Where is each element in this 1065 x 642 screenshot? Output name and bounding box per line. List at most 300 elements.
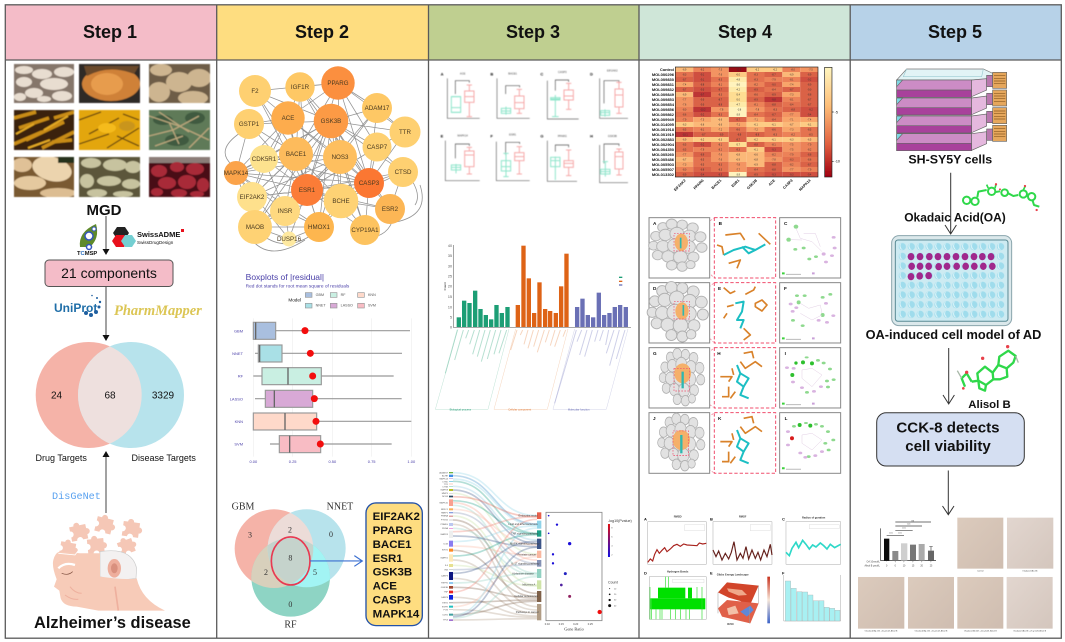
chart: cell viability bars: 25 [930, 565, 933, 567]
legend: p value colour and count: 20 [614, 594, 617, 596]
chart: cell viability bars: 10 [903, 565, 906, 567]
sankey flows [453, 473, 537, 620]
micrographs: cell morphology: Okadaic(OA) 24h +10 μmol/L Alisol B [865, 630, 898, 633]
heatmap cell values: -8.9 -9.4 -9.3 -3.8 -8.9 -9.3 -9.3 -9.4 [682, 175, 812, 177]
callout: hub gene list: GSK3B [373, 567, 412, 579]
chart: GO enrichment bars: 0 [450, 326, 452, 330]
sankey right pathways: MAPK signaling pathway [510, 541, 540, 545]
subplot titles: C [540, 72, 543, 77]
chart: boxplots of residuals [230, 272, 416, 464]
heatmap row labels: MOL014095 [652, 122, 675, 127]
chart: GO enrichment bars: Molecular function [568, 408, 590, 412]
chart: cell viability bars: 15 [912, 565, 915, 567]
heatmap row labels: MOL013302 [652, 172, 675, 177]
venn diagram: drug and disease targets: 3329 [152, 390, 175, 402]
subplot titles: GSK3B [608, 134, 617, 138]
chart: cell viability bars: - [886, 562, 887, 564]
callout: hub gene list: ACE [373, 581, 397, 593]
legend: p value colour and count: 2 [611, 554, 612, 556]
subplot titles: H [590, 134, 593, 139]
header: Step 4 [639, 5, 850, 60]
docking row J K L [649, 413, 841, 473]
axis labels: 0.75 [368, 459, 376, 464]
parallelogram category brackets [435, 329, 628, 409]
heatmap colour bar: -5 [835, 110, 838, 114]
heatmap cell values: -7.3 -8.5 -8.3 -7.8 -6.9 -8.8 -8.2 -8.7 [682, 165, 812, 167]
heatmap column labels: CASP3 [782, 179, 794, 190]
node labels: CYP19A1 [351, 227, 379, 234]
chart: cell viability bars: 0 [886, 565, 888, 567]
chart: GO enrichment bars: 10 [448, 305, 452, 309]
heatmap cell values: -8.3 -9.1 -7.6 -6.0 -8.3 -8.7 -6.9 -8.9 [682, 75, 812, 77]
heatmap cell values: -6.9 -9.7 -8.3 -5.4 -8.6 -8.9 -7.3 -8.8 [682, 95, 812, 97]
node labels: BCHE [332, 198, 350, 205]
sankey left genes: MAPK3 [441, 533, 449, 536]
panel: step 5 experiment workflow [858, 69, 1053, 633]
venn diagram: GBM NNET RF: RF [284, 620, 297, 631]
venn diagram: drug and disease targets: 68 [104, 390, 116, 402]
node labels: NOS3 [332, 154, 349, 161]
sankey left genes: IL1B [444, 543, 449, 545]
heatmap column labels: PPARG [693, 178, 705, 190]
sankey left genes: TTR [444, 484, 448, 486]
heatmap cell values: -8.5 -9.2 -8.1 -5.7 -8.8 -8.1 -7.5 -7.9 [682, 145, 812, 147]
docking row D E F [647, 282, 841, 343]
chart: cell viability bars: **** [902, 529, 906, 531]
legend: p value colour and count [608, 519, 632, 607]
subplot titles: MAPK14 [457, 133, 468, 137]
node labels: ESR2 [382, 206, 399, 213]
logo: UniProt [54, 295, 101, 317]
figure: molecular dynamics panels [644, 514, 841, 626]
callout: hub gene list: BACE1 [373, 539, 412, 551]
chart: cell viability bars: + [912, 562, 914, 564]
callout: hub gene list: EIF2AK2 [373, 511, 420, 523]
dot plot: Gene Ratio [564, 626, 584, 631]
sankey right pathways: TNF signaling pathway [511, 531, 539, 535]
node labels: F2 [251, 88, 259, 95]
node labels: GSTP1 [239, 121, 260, 128]
heatmap row labels: MOL005260 [652, 152, 675, 157]
legend: p value colour and count: Count [608, 580, 618, 584]
sankey right pathways: Lipid and atherosclerosis [508, 522, 538, 526]
callout: hub gene list: ESR1 [373, 553, 403, 565]
node labels [224, 80, 412, 243]
sankey left genes: ESR1 [442, 602, 449, 604]
chart: GO enrichment bars: 35 [448, 254, 452, 258]
legend: p value colour and count: 40 [614, 605, 617, 607]
subplot titles: ESR1 [509, 132, 517, 136]
arrow: components to venn [102, 286, 110, 341]
sankey right pathways: Endocrine resist [518, 513, 538, 517]
dot plot: 0.15 [559, 622, 564, 626]
venn diagram: GBM NNET RF: NNET [327, 501, 353, 512]
chart: GO enrichment bars: Count [443, 282, 447, 290]
sankey left genes [439, 472, 453, 622]
sankey left genes: NOS3 [442, 496, 449, 498]
chart: RMSF [710, 514, 772, 564]
dot plot: 0.25 [588, 622, 593, 626]
chart: GO enrichment bars: Biological process [450, 408, 472, 412]
heatmap colour bar: -10 [835, 160, 840, 164]
chart: gene expression boxplots [441, 69, 628, 183]
chart: cell viability bars: + [921, 562, 923, 564]
heatmap row labels [652, 67, 675, 177]
subplot titles [441, 69, 618, 139]
chart: GO enrichment bars: 40 [448, 244, 452, 248]
chart: cell viability bars: **** [889, 534, 893, 536]
panel: step 4 docking and dynamics [644, 67, 841, 626]
heatmap column labels: MAPK14 [798, 178, 812, 192]
heatmap row labels: MOL002883 [652, 137, 675, 142]
docking row A B C [649, 218, 841, 278]
heatmap row labels: MOL009854 [652, 102, 675, 107]
heatmap column labels [673, 178, 812, 192]
subplot titles: CASP3 [558, 70, 567, 74]
venn diagram: GBM NNET RF [232, 501, 422, 631]
chart: RMSF: B [710, 516, 713, 521]
micrographs: cell morphology [858, 518, 1053, 633]
icon: SwissADME logo [112, 227, 184, 247]
legend: KNN [368, 293, 376, 297]
label: SH-SY5Y cells: SH-SY5Y cells [908, 152, 992, 166]
sankey left genes: PTGS2 [441, 520, 449, 522]
panel letters: A [653, 221, 657, 226]
node labels: ADAM17 [365, 105, 390, 112]
panel: step 2 network and machine learning [224, 66, 422, 631]
heatmap column labels: ESR1 [731, 179, 740, 188]
subplot titles: D [590, 72, 593, 77]
icon: alisol B molecule [957, 345, 1018, 391]
heatmap row labels: MOL004350 [652, 147, 675, 152]
legend: p value colour and count: 6 [611, 536, 613, 538]
panel letters: H [717, 351, 721, 356]
sankey left genes: ADAM17 [439, 472, 449, 475]
icon: TCMSP logo: TCMSP [77, 251, 97, 257]
venn diagram: GBM NNET RF: 5 [313, 568, 317, 577]
heatmap cell values: -6.9 -6.2 -6.3 -8.7 -6.2 -6.1 -6.3 -6.5 [682, 140, 812, 142]
heatmap cell values: -7.7 -8.9 -7.6 -6.8 -6.6 -8.2 -7.9 -8.8 [682, 155, 812, 157]
arrow: model to CCK-8 [943, 348, 954, 404]
venn diagram: GBM NNET RF: 0 [329, 530, 333, 539]
venn diagram: GBM NNET RF: 0 [288, 600, 292, 609]
sankey left genes: INS [444, 569, 449, 571]
box: CCK-8 detects cell viability: CCK-8 detects [896, 420, 1000, 436]
node labels: HMOX1 [308, 224, 331, 231]
venn diagram: drug and disease targets: Drug Targets [36, 453, 87, 463]
sankey right pathways: Influenza A [522, 583, 535, 587]
chart: boxplots of residuals: LASSO [230, 396, 243, 401]
node labels: CTSD [395, 169, 412, 176]
panel letters: F [784, 286, 787, 291]
venn diagram: GBM NNET RF: 3 [248, 531, 252, 540]
sankey right pathways: Prostate cancer [518, 552, 536, 556]
chart: boxplots of residuals: KNN [235, 419, 243, 424]
sankey right pathways: Pathways in cancer [516, 610, 539, 614]
heatmap cell values: -8.5 -7.9 -8.2 -8.3 -6.1 -9.3 -7.5 -8.2 [682, 150, 812, 152]
herb photo grid [12, 64, 211, 198]
heatmap row labels: MOL009862 [652, 112, 675, 117]
node labels: CASP3 [359, 180, 380, 187]
heatmap cell values: -6.7 -8.5 -7.6 -6.9 -6.8 -7.8 -8.3 -8.6 [682, 160, 812, 162]
title: MGD: MGD [86, 202, 122, 219]
micrographs: cell morphology: Okadaic(OA) 24h [1022, 569, 1038, 572]
chart: GO enrichment bars: 20 [448, 285, 452, 289]
callout: hub gene list [366, 503, 422, 626]
sankey left genes: TP53 [443, 620, 449, 622]
panel letters: K [718, 416, 722, 421]
legend: p value colour and count: 30 [614, 600, 617, 602]
label: DisGeNet: DisGeNet [52, 491, 101, 503]
sankey left genes: CDK5 [442, 614, 449, 616]
chart: GO enrichment bars: 25 [448, 275, 452, 279]
sankey right pathways: Alzheimer disease [512, 571, 534, 575]
callout: hub gene list: PPARG [373, 525, 413, 537]
sankey left genes: ACHE [442, 475, 449, 478]
icon: SwissADME logo: SwissADME [137, 230, 180, 239]
figure: molecular docking panels [647, 218, 841, 473]
illustration: stacked culture flasks [897, 69, 1007, 151]
chart: RMSD [644, 514, 706, 564]
chart: RMSD: A [644, 516, 647, 521]
heatmap column labels: EIF2AK2 [673, 179, 687, 192]
sankey left genes: MAPK8 [441, 489, 449, 492]
legend: p value colour and count: -log10(Pvalue) [608, 519, 632, 523]
panel letters: E [718, 286, 721, 291]
subplot titles: PPARG [558, 134, 567, 138]
heatmap cell values: -7.4 -8.8 -8.1 -3.6 -8.2 -9.0 -7.4 -8.9 [682, 85, 812, 87]
illustration: 96 well plate [892, 236, 1012, 326]
heatmap cell values: -8.5 -8.1 -7.2 -8.6 -7.2 -8.6 -7.3 -8.5 [682, 130, 812, 132]
subplot titles: B [490, 72, 493, 77]
header: Step 5 [850, 5, 1062, 60]
panel letters: L [785, 416, 788, 421]
legend: Model [288, 298, 301, 303]
heatmap column labels: GSK3B [746, 178, 758, 190]
box: CCK-8 detects cell viability: cell viability [905, 438, 991, 455]
sankey left genes: MAPK10 [439, 501, 449, 504]
heatmap row labels: MOL005507 [652, 167, 675, 172]
legend: SVM [368, 304, 376, 308]
icon: head with puzzle pieces [53, 513, 165, 611]
node labels: ESR1 [299, 187, 316, 194]
node labels: MAOB [246, 224, 264, 231]
heatmap cell values: -8.0 -8.8 -8.5 -7.7 -8.4 -8.8 -7.7 -7.9 [682, 170, 812, 172]
heatmap cell values: -10.1 -8.7 -8.9 -8.9 -8.9 -8.3 -8.2 -8.5 [682, 135, 813, 137]
arrow: CCK-8 to results [942, 470, 954, 515]
heatmap cell values: -8.7 -9.1 -8.5 -4.8 -8.3 -7.9 -8.1 -9.2 [682, 80, 812, 82]
icon: TCMSP logo [77, 224, 97, 257]
subplot titles: F [490, 134, 493, 139]
chart title: Boxplots of |residual| [246, 272, 324, 282]
heatmap column labels: ACE [768, 178, 776, 187]
node labels: ACE [282, 115, 294, 122]
label: Alisol B: Alisol B [968, 399, 1011, 411]
chart: radius of gyration [782, 515, 841, 564]
callout: hub gene list: MAPK14 [373, 609, 420, 621]
heatmap cell values: -7.6 -9.0 -8.8 -4.7 -8.1 -8.8 -8.4 -8.7 [682, 105, 812, 107]
dot plot: 0.10 [545, 622, 550, 626]
axis labels: 0.25 [289, 459, 297, 464]
sankey left genes: NR3C1 [441, 509, 449, 511]
arrow: to gene list [310, 556, 362, 566]
heatmap cell values: -8.7 -9.3 -8.7 -4.2 -8.9 -8.4 -8.7 -9.0 [682, 90, 812, 92]
chart: residue energy bars [782, 570, 841, 621]
venn diagram: drug and disease targets [36, 342, 196, 463]
panel letters: B [719, 221, 723, 226]
chart: cell viability bars [865, 520, 936, 567]
logo: UniProt: UniProt [54, 301, 97, 315]
heatmap cell values [682, 70, 813, 177]
micrographs: cell morphology: Okadaic(OA) 24h +25 μmol/L Alisol B [1013, 630, 1047, 633]
header: Step 1 [5, 5, 216, 60]
subplot titles: BACE1 [508, 71, 518, 75]
heatmap row labels: MOL002904 [652, 142, 675, 147]
venn diagram: drug and disease targets: Disease Targets [132, 453, 196, 463]
venn diagram: GBM NNET RF: 2 [264, 568, 268, 577]
header: Step 4: Step 4 [718, 22, 772, 42]
venn diagram: GBM NNET RF: GBM [232, 501, 255, 512]
node labels: EIF2AK2 [240, 194, 265, 201]
sankey left genes: CASP8 [441, 596, 449, 599]
header: Step 5: Step 5 [928, 22, 982, 42]
header: Step 1: Step 1 [83, 22, 137, 42]
node labels: INSR [278, 208, 293, 215]
heatmap row labels: MOL005503 [652, 162, 675, 167]
highlight ring [271, 537, 310, 585]
legend: RF [341, 293, 346, 297]
chart: cell viability bars: **** [898, 534, 902, 536]
micrographs: cell morphology: Okadaic(OA) 24h +20 μmol/L Alisol B [964, 630, 997, 633]
icon: SwissADME logo: SwissDrugDesign [137, 240, 174, 245]
sankey left genes: IL6 [445, 565, 449, 567]
chart: boxplots of residuals: SVM [234, 442, 243, 447]
node labels: CASP7 [367, 144, 388, 151]
title: Alzheimer's disease: Alzheimer’s disease [34, 614, 191, 632]
legend [288, 293, 376, 308]
micrographs: cell morphology: Okadaic(OA) 24h +15 μmol/L Alisol B [915, 630, 948, 633]
sankey left genes: HSP90 [441, 583, 449, 585]
sankey left genes: GSK3B [441, 587, 449, 589]
chart: cell viability bars: OA 10nmol/L [867, 561, 881, 564]
heatmap cell values: -8.0 -10.2 -7.8 -3.6 -7.8 -8.3 -8.8 -9.2 [682, 110, 813, 112]
dot plot: 0.20 [573, 622, 579, 626]
sankey left genes: MAPK14 [439, 478, 449, 481]
panel letters: D [653, 286, 657, 291]
axis labels: 0.00 [249, 459, 258, 464]
sankey left genes: CTSB [442, 486, 449, 488]
heatmap colour bar [825, 67, 840, 177]
sankey left genes: SIRT1 [442, 550, 449, 552]
heatmap row labels: MOL001918 [652, 127, 675, 132]
panel letters: J [653, 416, 656, 421]
heatmap row labels: Control [660, 67, 674, 72]
docking legend swatches [782, 273, 815, 469]
sankey left genes: CASP3 [441, 575, 449, 578]
panel letters: G [653, 351, 657, 356]
subplot titles: ACE [460, 71, 466, 75]
chart: Gibbs free energy landscape: RMSD [727, 624, 734, 626]
subplot titles: EIF2AK2 [607, 69, 618, 73]
axis labels: 1.00 [407, 459, 416, 464]
heatmap row labels: MOL009856 [652, 107, 675, 112]
box: 21 components [45, 260, 173, 286]
chart: GO enrichment bars: 5 [450, 315, 452, 319]
looping edges [225, 133, 422, 251]
edges [236, 83, 405, 239]
nodes [224, 66, 420, 246]
icon: okadaic acid molecule [963, 183, 1039, 211]
legend: GBM [316, 293, 324, 297]
sankey left genes: MAPK1 [441, 557, 449, 560]
heatmap cell values: -6.9 -8.2 -7.5 -12.1 -6.2 -6.2 -8.0 -7.5 [682, 70, 813, 72]
heatmap row labels: MOL001919 [652, 132, 675, 137]
chart: cell viability bars: 20 [920, 565, 924, 567]
subplot titles: G [540, 134, 543, 139]
chart: GO enrichment bars [435, 244, 631, 412]
micrographs: cell morphology: Control [977, 569, 984, 572]
chart: GO enrichment bars: Cellular component [508, 408, 531, 412]
legend: p value colour and count: 4 [611, 545, 613, 547]
dashed connectors [689, 218, 714, 473]
sankey left genes: MMP9 [442, 493, 449, 495]
chart: cell viability bars: 0 [895, 565, 897, 567]
heatmap row labels: MOL000296 [652, 72, 675, 77]
arrow: MGD to components [102, 216, 110, 255]
node labels: DUSP16 [277, 236, 302, 243]
dot plot [545, 512, 602, 631]
arrow: flask to plate [945, 173, 956, 234]
chart: radius of gyration: Radius of gyration [802, 515, 826, 519]
heatmap: binding energies [652, 67, 840, 192]
sankey left genes: PARP1 [441, 511, 449, 514]
sankey right pathways: Cellular senescence [514, 594, 539, 598]
heatmap cell values: -6.3 -6.6 -6.6 -7.1 -6.1 -6.1 -6.7 -6.1 [682, 125, 812, 127]
legend [619, 277, 622, 285]
sankey left genes: CTSD [442, 481, 448, 483]
node labels: IGF1R [291, 84, 310, 91]
subplot titles: E [441, 134, 444, 139]
chart: boxplots of residuals: GBM [234, 328, 243, 333]
sankey left genes: FOS [444, 609, 449, 611]
heatmap column labels: BACE1 [711, 179, 722, 190]
sankey right pathways: IL-17 signaling pathway [511, 562, 540, 566]
heatmap row labels: MOL009849 [652, 92, 675, 97]
chart: cell viability bars: + [903, 562, 905, 564]
legend: LASSO [341, 304, 353, 308]
header: Step 2: Step 2 [295, 22, 349, 42]
node labels: GSK3B [321, 118, 341, 125]
chart: residue energy bars: F [782, 570, 785, 575]
heatmap cell values: -8.6 -9.2 -8.3 -3.8 -8.4 -8.7 -7.7 -9.4 [682, 115, 812, 117]
chart: boxplots of residuals: RF [238, 374, 244, 379]
node labels: PPARG [327, 80, 349, 87]
box rows [253, 322, 411, 453]
chart: hydrogen bonds: Hydrogen Bonds [667, 569, 689, 573]
docking row G H I [649, 348, 841, 408]
box: CCK-8 detects cell viability [877, 413, 1024, 466]
sankey left genes: EGFR [442, 606, 448, 608]
chart: cell viability bars: Alisol B µmol/L [865, 564, 881, 567]
venn diagram: GBM NNET RF: 2 [288, 525, 292, 534]
chart: boxplots of residuals: NNET [232, 351, 244, 356]
chart: hydrogen bonds [644, 569, 706, 619]
slanted term labels [445, 330, 625, 403]
treated wells [908, 253, 996, 280]
callout: hub gene list: CASP3 [373, 595, 411, 607]
chart: radius of gyration: C [782, 516, 785, 521]
chart: GO enrichment bars: 15 [448, 295, 452, 299]
